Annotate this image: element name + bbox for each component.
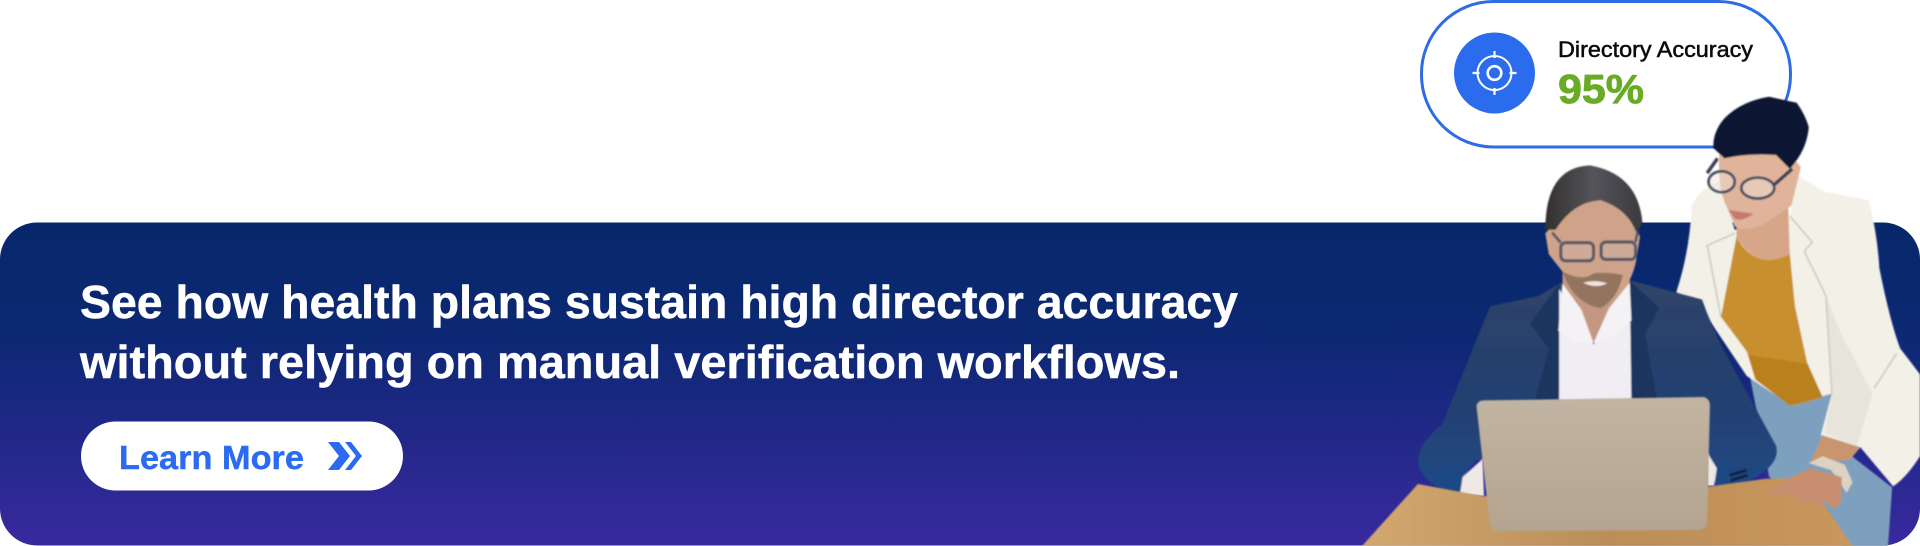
woman shirt shadow (1749, 355, 1823, 406)
value: 95%: 95% (1558, 66, 1644, 112)
man seated (1418, 165, 1777, 497)
man shirt collar (1558, 283, 1631, 343)
icon: target (1454, 32, 1535, 114)
woman forearm (1810, 435, 1860, 463)
heading: See how health plans sustain high director accuracy (80, 276, 1238, 328)
man shirt (1559, 289, 1632, 404)
woman neck (1736, 202, 1790, 262)
woman blazer lapel lines (1707, 216, 1897, 393)
man right cuff (1707, 453, 1717, 486)
table (1362, 478, 1853, 546)
man mouth (1583, 281, 1607, 286)
woman watch (1809, 456, 1853, 493)
woman face (1719, 153, 1801, 229)
heading: without relying on manual verification workflows. (79, 336, 1180, 388)
label: Directory Accuracy: Directory Accuracy (1558, 37, 1753, 62)
button: Learn More (81, 422, 403, 490)
button: Learn More: Learn More (119, 439, 304, 476)
man sleeve buttons (1730, 470, 1748, 481)
man hair (1545, 165, 1642, 233)
man face (1545, 200, 1640, 308)
man glasses (1561, 242, 1636, 261)
man jacket (1418, 280, 1777, 497)
woman jeans (1749, 369, 1892, 546)
woman standing (1676, 97, 1920, 546)
heading (79, 276, 1238, 388)
man left cuff (1460, 459, 1484, 496)
woman hand (1766, 468, 1841, 509)
woman mouth (1729, 210, 1754, 220)
callout pill: Directory Accuracy (1422, 2, 1790, 147)
woman blazer crease shading (1824, 296, 1872, 446)
man lapels (1530, 280, 1659, 400)
man glasses temple (1552, 232, 1638, 243)
woman hair (1713, 97, 1809, 169)
panel: gradient banner background (0, 222, 1920, 546)
laptop (1476, 397, 1710, 531)
woman blazer (1676, 176, 1920, 486)
man beard (1563, 272, 1623, 308)
woman glasses temple (1707, 158, 1792, 185)
woman shirt (1721, 237, 1823, 406)
photo: two colleagues at a laptop (1362, 97, 1920, 546)
man neck (1563, 272, 1630, 343)
woman glasses (1709, 171, 1774, 198)
